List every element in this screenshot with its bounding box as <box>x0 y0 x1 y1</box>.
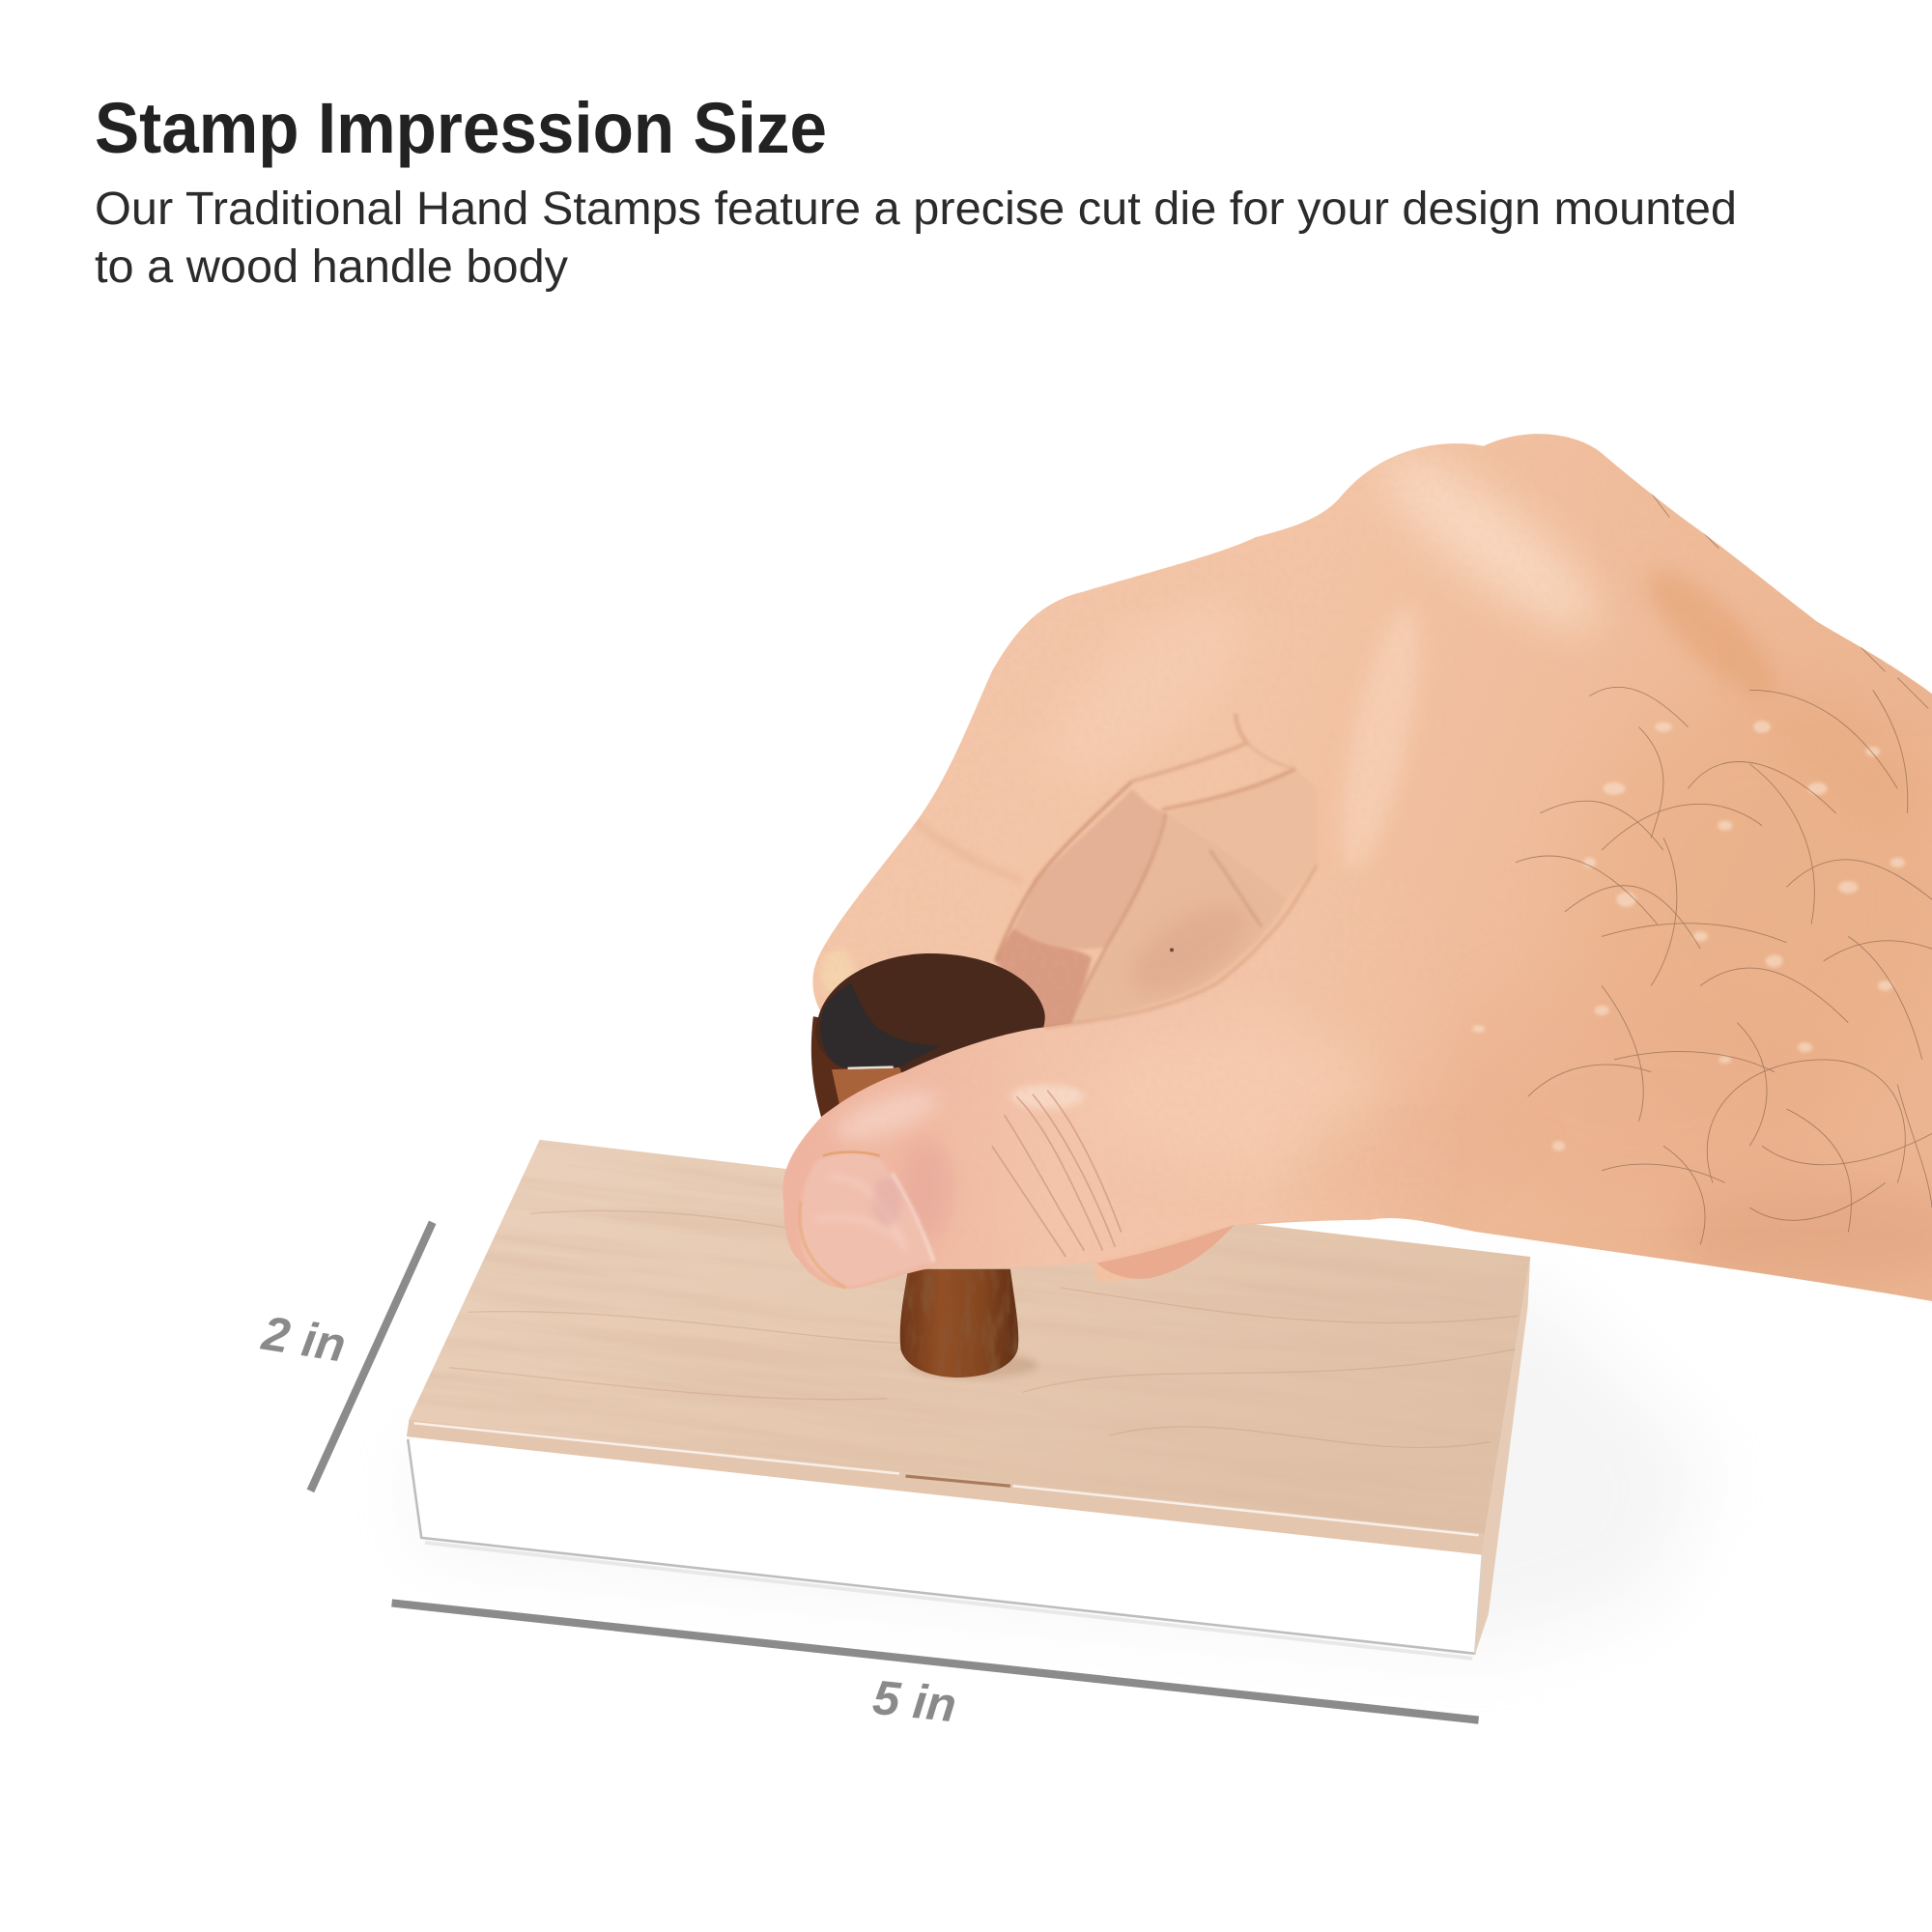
dome side <box>811 1016 912 1123</box>
photo: hand pressing a wooden stamp <box>278 419 1932 1720</box>
dome top <box>815 953 1045 1084</box>
thumb <box>782 865 1416 1289</box>
lower curled finger <box>996 927 1092 1033</box>
handle shaft <box>894 1269 1037 1380</box>
finger creases <box>996 781 1132 961</box>
wood top face <box>410 1140 1530 1534</box>
upper palm <box>1177 806 1207 823</box>
palm interior <box>899 714 1318 1033</box>
right wood edge <box>1475 1257 1530 1655</box>
stamp handle dome <box>811 953 1045 1123</box>
subtitle text: Our Traditional Hand Stamps feature a precise cut die for your design mounted <box>95 184 1737 235</box>
thumbnail <box>800 1152 934 1288</box>
pale spots <box>1472 721 1905 1151</box>
curled middle finger pad <box>1014 788 1166 950</box>
hand <box>777 419 1932 1319</box>
skin tone variation <box>820 430 1932 1282</box>
front lip wood strip <box>407 1419 1485 1555</box>
dimension label: 2 in: 2 in <box>258 1306 350 1373</box>
skin texture <box>788 419 1932 1319</box>
white front face <box>407 1436 1482 1655</box>
subtitle text <box>95 184 1737 293</box>
subtitle text: to a wood handle body <box>95 242 568 293</box>
stamp block shadow <box>419 1282 1713 1651</box>
hairs <box>1516 493 1932 1244</box>
lower palm <box>1069 813 1288 1024</box>
wooden stamp block <box>407 1140 1530 1661</box>
dimension label: 5 in: 5 in <box>870 1670 959 1732</box>
knuckle creases <box>992 1091 1122 1257</box>
title: Stamp Impression Size <box>95 88 827 168</box>
back of hand and index finger <box>812 434 1932 1301</box>
dimension line: height <box>310 1222 433 1491</box>
dimension line: width <box>392 1603 1479 1720</box>
finger tip under thumb <box>1096 1225 1235 1279</box>
